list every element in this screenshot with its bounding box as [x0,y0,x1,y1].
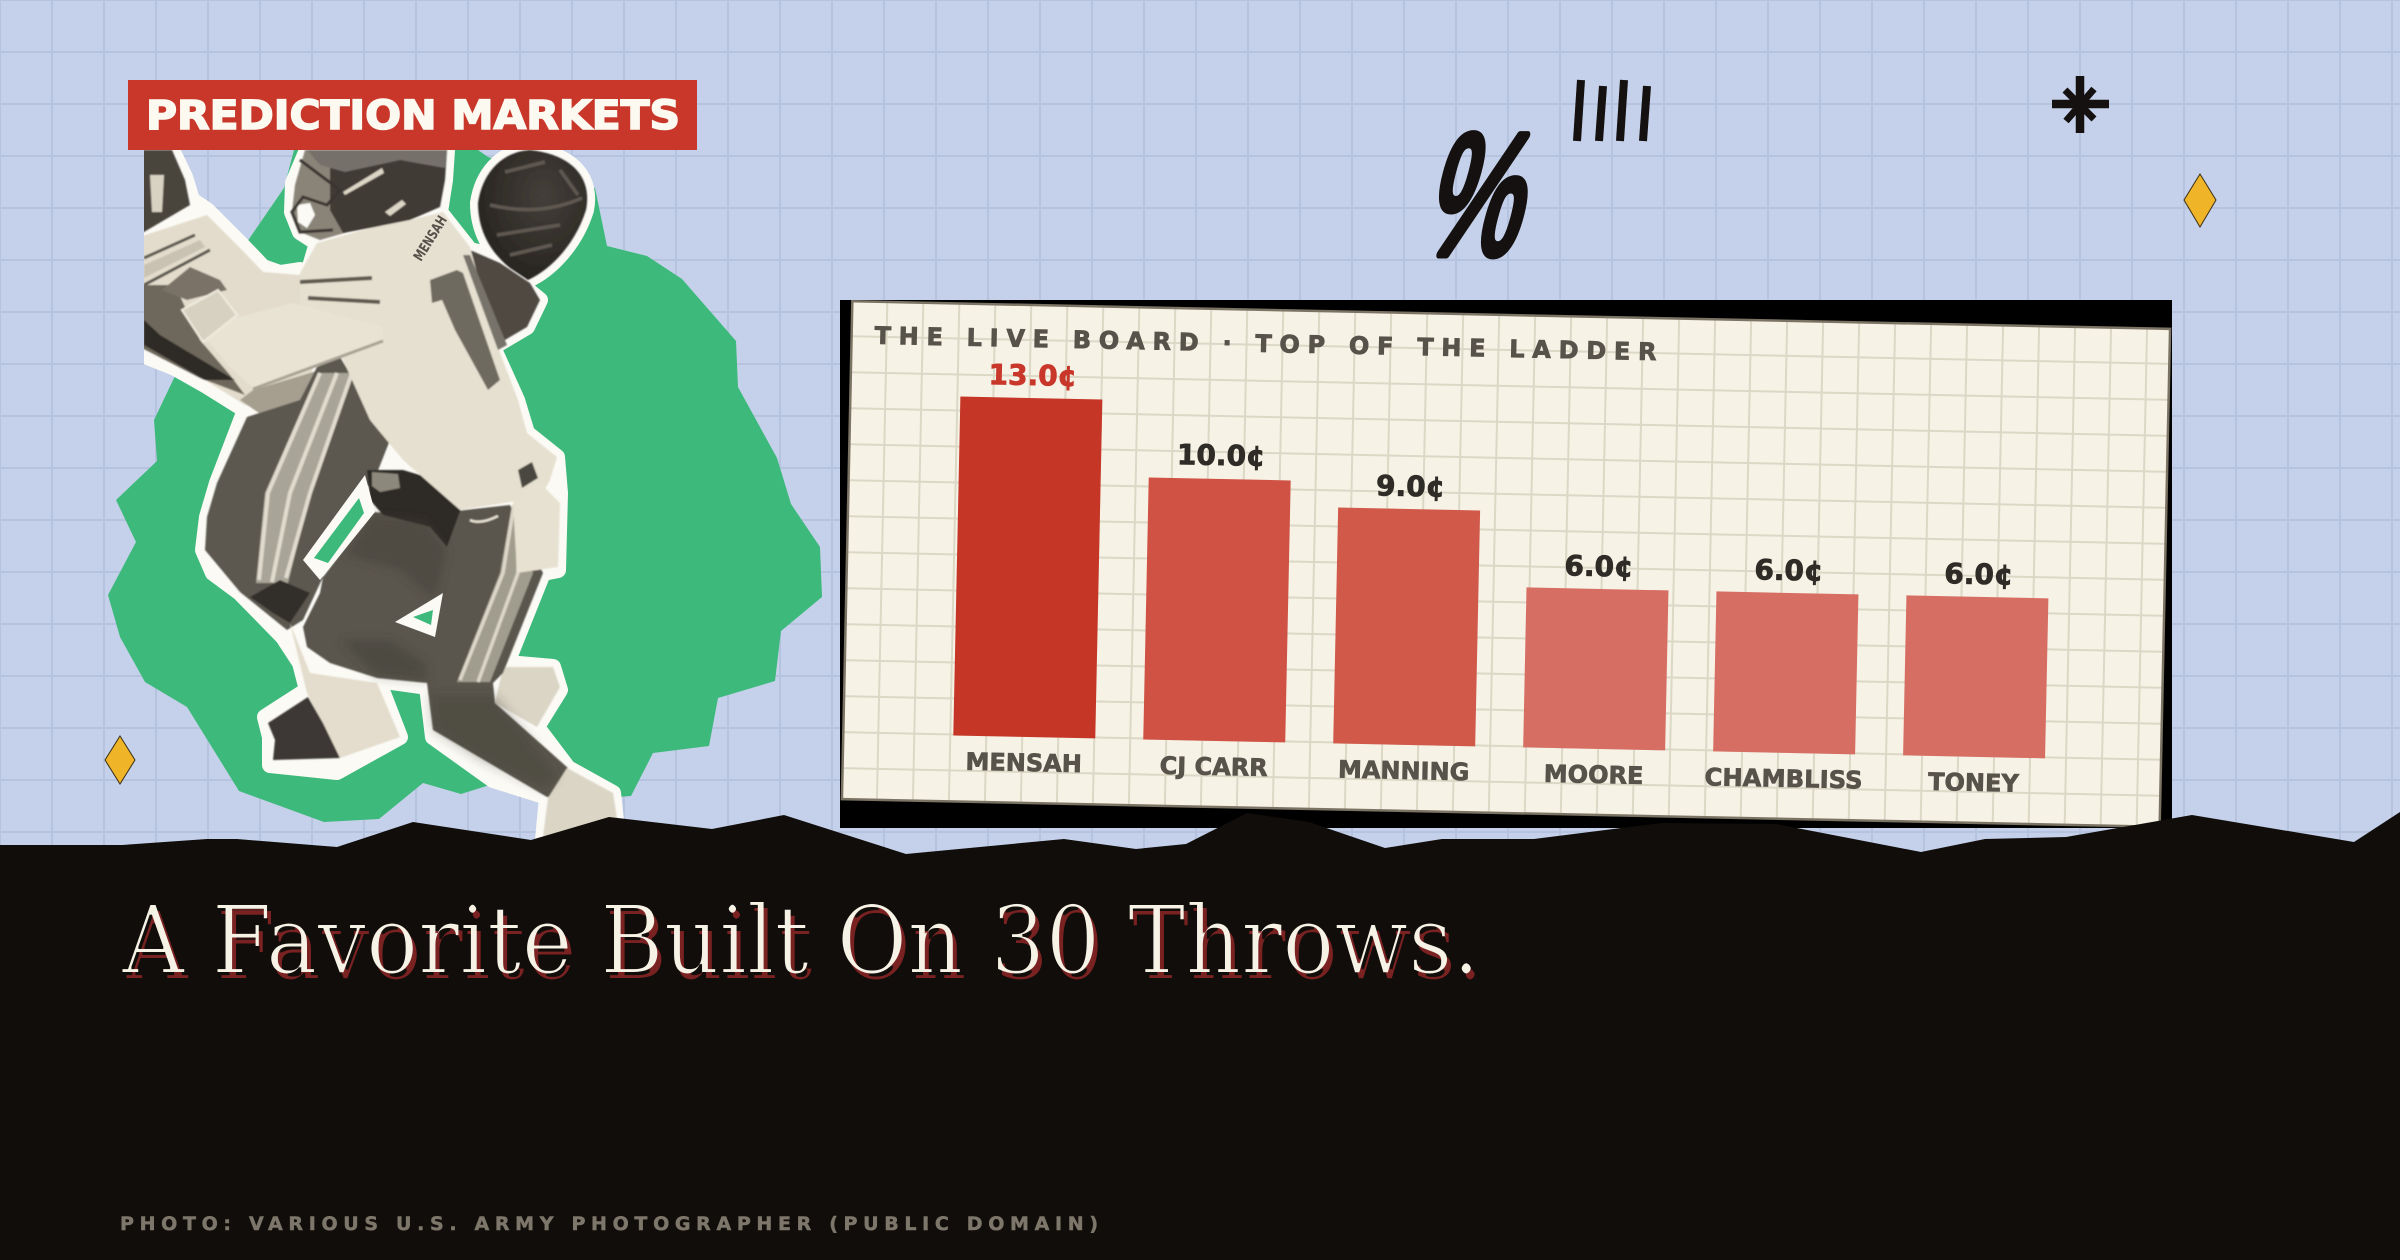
chart title: THE LIVE BOARD · TOP OF THE LADDER [874,322,1657,366]
gap between legs [303,475,375,580]
panel: live board chart card [842,301,2170,827]
rear dark helmet [478,150,587,280]
bar: Mensah: 13.0¢ [988,358,1077,393]
bar: Mensah [952,358,1103,778]
icon: tally marks [1577,80,1647,141]
back leg stripes [256,373,352,583]
soft photo shading [340,515,558,790]
bar: Moore: 6.0¢ [1564,549,1634,584]
back player torso [144,214,313,406]
back player jersey stripes [144,235,210,285]
bar: Toney [1902,556,2049,798]
headline: A Favorite Built On 30 Throws. [121,886,1480,996]
bar: Manning: MANNING [1338,756,1470,786]
mask backing [292,150,348,240]
back player legs [205,357,390,630]
jersey number [430,270,500,390]
back leg strap [250,580,310,623]
badge: prediction markets [128,80,697,150]
bar: Chambliss [1704,552,1867,795]
back foot of runner [495,667,560,727]
hand [162,267,227,300]
white sticker outline [130,150,617,840]
back player arm shadow [144,284,245,396]
running player pants [303,505,568,797]
waist decals [372,472,400,492]
bar: Manning [1332,468,1481,786]
swoosh [470,516,498,522]
back player shoes [268,697,340,760]
bar: CJ Carr: CJ CARR [1159,752,1268,782]
bar: Moore: MOORE [1544,760,1644,790]
rear helmet facemask lines [490,162,582,255]
photo details [130,150,617,837]
gap under thigh [395,593,443,637]
card paper [842,301,2170,827]
jersey shoulder stripes [300,278,380,302]
jersey name: MENSAH [411,213,451,264]
towel [513,480,560,573]
face mask opening [297,203,315,228]
front foot [543,768,617,837]
back player head [144,150,191,233]
bar: CJ Carr [1142,438,1292,782]
bar: Mensah: MENSAH [965,748,1082,778]
icon: yellow diamond right [2184,174,2216,227]
bar: CJ Carr: 10.0¢ [1177,438,1266,473]
card backing [840,300,2172,828]
back player hip under arm [240,371,315,414]
wristband [182,290,237,342]
headline: A Favorite Built On 30 Throws. [125,892,1484,1002]
bar: Toney: 6.0¢ [1944,557,2014,592]
bar: Chambliss: CHAMBLISS [1704,763,1863,795]
back leg sock [290,623,400,758]
bar: Moore [1522,548,1669,790]
bar: Chambliss: 6.0¢ [1754,553,1824,588]
jersey [300,212,557,510]
bar: Toney: TONEY [1928,768,2020,798]
sleeve arm [252,342,337,386]
front helmet [330,150,447,233]
torn black lower band [0,812,2400,1260]
bar: Manning: 9.0¢ [1376,469,1445,504]
icon: percent glyph: % [1410,99,1556,292]
pants stripes [457,505,533,682]
green paper blob [108,150,822,822]
icon: yellow diamond left [105,736,135,784]
badge: prediction markets: PREDICTION MARKETS [146,93,680,139]
pouch and belt [366,468,461,546]
photo credit: PHOTO: VARIOUS U.S. ARMY PHOTOGRAPHER (PUBLIC DOMAIN) [120,1213,1098,1235]
icon: asterisk [2052,76,2109,133]
football [470,250,540,347]
player cutout photo [130,150,617,840]
